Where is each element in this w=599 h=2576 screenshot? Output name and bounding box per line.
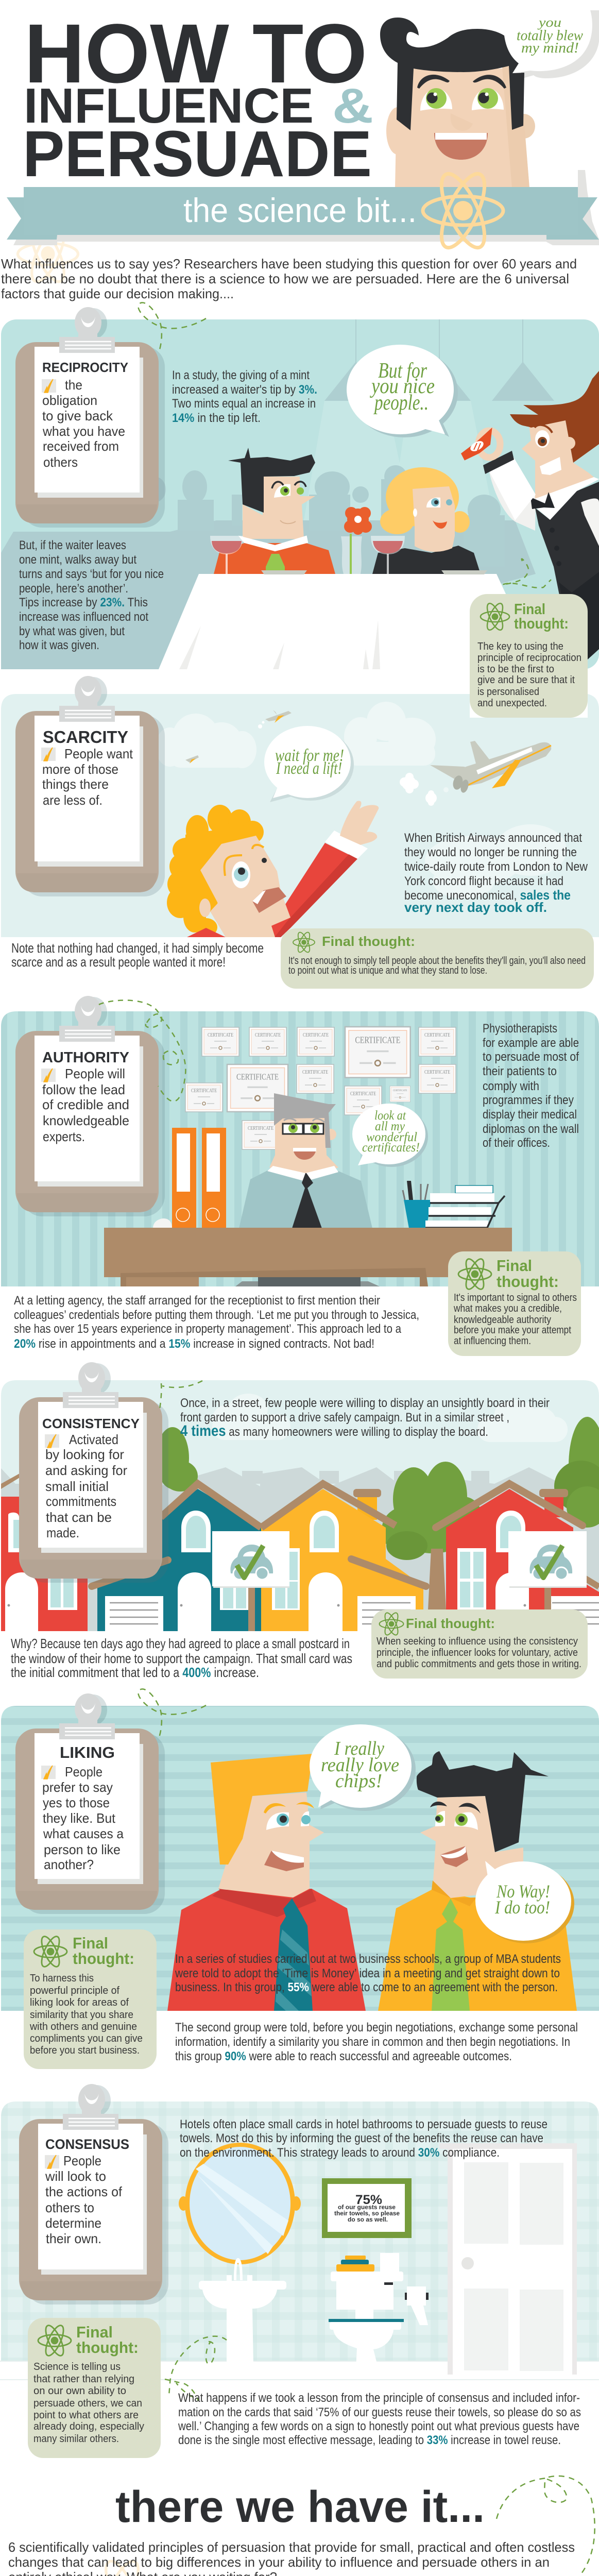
certificate large <box>227 1064 288 1112</box>
final thought: consistency: and public commitments and gets those in writing. <box>376 1658 581 1670</box>
lower text: But, if the waiter leaves <box>19 538 126 552</box>
certificate <box>297 1027 334 1056</box>
lower text: people, here’s another’. <box>19 582 128 596</box>
faded atom behind intro <box>18 222 78 286</box>
dashed path <box>138 1689 206 1739</box>
title: how to influence and persuade <box>23 6 373 190</box>
speech bubble: you totally blew my mind: you <box>537 15 561 30</box>
street text <box>180 1396 550 1439</box>
dashed path <box>138 302 206 353</box>
physiotherapists text: display their medical <box>483 1108 577 1122</box>
dashed path to footer atom <box>497 2476 595 2576</box>
hotels text: on the environment. This strategy leads to around 30% compliance. <box>180 2146 500 2160</box>
certificate <box>345 1086 382 1115</box>
table <box>159 570 541 669</box>
bubble: i really really love chips <box>310 1724 416 1811</box>
sign: drive safely right <box>508 1531 587 1631</box>
final thought: consensus: Final <box>76 2323 113 2341</box>
final thought: authority: what makes you a credible, <box>453 1303 562 1314</box>
physiotherapists text: to persuade most of <box>483 1050 579 1064</box>
bubble: wait for me: wait for me! <box>275 746 344 765</box>
certificate <box>242 1121 279 1149</box>
study text: 14% in the tip left. <box>172 411 261 425</box>
final thought: liking: thought: <box>73 1950 134 1968</box>
clipboard: reciprocity: RECIPROCITY <box>42 360 128 375</box>
panel: consistency <box>1 1362 599 1631</box>
certificate <box>185 1083 223 1112</box>
clipboard: liking: they like. But <box>43 1810 116 1826</box>
street text: front garden to support a drive safely campaign. But in a similar street , <box>180 1411 509 1425</box>
bubble: look at all my wonderful certificates: look at <box>374 1109 406 1123</box>
certificate <box>249 1027 286 1056</box>
final thought: reciprocity: is personalised <box>477 686 539 698</box>
physiotherapists text: of their offices. <box>483 1136 550 1150</box>
mba text <box>175 1952 561 1994</box>
desk items <box>403 1181 505 1228</box>
toilet <box>329 2253 429 2379</box>
clipboard: scarcity: things there <box>42 776 109 792</box>
panel: reciprocity <box>1 302 599 669</box>
certificates <box>185 1027 456 1149</box>
physiotherapists text: Physiotherapists <box>483 1022 557 1036</box>
speech bubble: you totally blew my mind <box>494 10 599 78</box>
panel: scarcity <box>1 676 599 937</box>
british airways text <box>404 831 588 915</box>
panel: consensus <box>0 2084 599 2401</box>
note text: scarce and as a result people wanted it more! <box>11 954 226 970</box>
hotels text: towels. Most do this by informing the guest of the benefits the reuse can have <box>180 2131 543 2145</box>
atom icon <box>38 2323 71 2358</box>
bubble: but for you nice people <box>347 345 458 437</box>
lower text: Tips increase by 23%. This <box>19 596 148 609</box>
clipboard: scarcity: more of those <box>42 761 118 777</box>
eyes <box>420 88 504 111</box>
banner: the science bit: the science bit... <box>183 191 417 229</box>
atom icon <box>293 931 315 954</box>
speech bubble: you totally blew my mind: totally blew <box>517 28 583 44</box>
restaurant background <box>1 319 554 669</box>
certificate: CERTIFICATE <box>248 1126 273 1131</box>
title: how to influence and persuade: HOW TO <box>24 6 367 100</box>
title: how to influence and persuade: PERSUADE <box>23 117 372 190</box>
character: blond man <box>167 1754 366 2011</box>
physiotherapists text: for example are able <box>483 1036 579 1050</box>
framed sign: 75 percent: 75% <box>355 2193 382 2207</box>
clipboard: consistency: Activated <box>69 1432 118 1447</box>
final thought: consistency: When seeking to influence using the consistency <box>376 1636 578 1647</box>
closing paragraph: 6 scientifically validated principles of persuasion that provide for small, practical and often costless <box>8 2539 575 2555</box>
bubble: no way i do too <box>475 1861 574 1943</box>
character: dark-haired man <box>378 1751 577 2011</box>
certificate small <box>390 1086 410 1102</box>
certificate small: CERTIFICATE <box>393 1089 407 1092</box>
clipboard: reciprocity: others <box>43 454 78 470</box>
final thought: reciprocity <box>470 594 588 718</box>
physiotherapists text <box>483 1022 579 1150</box>
final thought: consistency: principle, the influencer looks for voluntary, active <box>376 1647 578 1658</box>
what happens text <box>178 2391 581 2447</box>
mouth <box>434 133 488 160</box>
clipboard: authority: follow the lead <box>42 1082 125 1097</box>
heading: there we have it: there we have it... <box>115 2482 485 2532</box>
icon: small planes <box>185 710 292 764</box>
certificate: CERTIFICATE <box>255 1032 281 1038</box>
final thought: authority: It's important to signal to others <box>454 1292 577 1303</box>
note text: Note that nothing had changed, it had simply become <box>11 940 264 956</box>
certificate large: CERTIFICATE <box>355 1035 400 1045</box>
final thought: authority: Final <box>497 1257 532 1275</box>
clipboard: authority: knowledgeable <box>43 1113 129 1128</box>
clipboard: liking: LIKING <box>60 1743 115 1761</box>
clipboard: consensus <box>19 2084 168 2304</box>
physiotherapists text: their patients to <box>483 1064 557 1078</box>
final thought: liking: powerful principle of <box>30 1985 119 1996</box>
clipboard: scarcity: SCARCITY <box>43 727 128 747</box>
final thought: liking: with others and genuine <box>29 2021 137 2032</box>
panel: liking <box>1 1689 599 2011</box>
trees <box>156 1417 599 1610</box>
title: how to influence and persuade: INFLUENCE <box>24 78 314 133</box>
dashed path <box>160 1381 202 1409</box>
clipboard: consensus: determine <box>45 2215 101 2231</box>
british airways text: very next day took off. <box>404 900 547 915</box>
final thought: authority: thought: <box>497 1273 559 1291</box>
british airways text: become uneconomical, sales the <box>404 887 571 903</box>
clipboard: consistency: commitments <box>46 1494 116 1509</box>
atom icon <box>481 601 509 632</box>
mirror <box>179 2143 301 2264</box>
clipboard: consistency: by looking for <box>45 1447 124 1462</box>
bubble: wait for me: I need a lift! <box>276 759 342 778</box>
clipboard: reciprocity: received from <box>43 438 119 454</box>
bubble: but for you nice people: But for <box>378 359 427 383</box>
dashed path <box>99 1000 185 1101</box>
character: science guy head <box>380 18 535 188</box>
clipboard: reciprocity: what you have <box>42 423 125 439</box>
eyes <box>430 1802 481 1830</box>
closing paragraph <box>8 2539 575 2576</box>
lower text <box>19 538 164 652</box>
final thought: reciprocity: give and be sure that it <box>477 674 575 686</box>
letting agency text <box>14 1294 419 1351</box>
clipboard: reciprocity <box>15 307 165 528</box>
intro text: factors that guide our decision making.... <box>1 286 234 301</box>
dashed path lower <box>502 559 551 588</box>
final thought: consensus: that rather than relying <box>33 2374 134 2385</box>
final thought: scarcity <box>281 928 594 989</box>
clipboard: liking <box>15 1693 165 1914</box>
teal house <box>92 1484 261 1631</box>
atom icon <box>380 1611 403 1637</box>
clipboard: liking: person to like <box>44 1842 121 1857</box>
red house left <box>1 1473 88 1631</box>
final thought: consensus: on our own ability to <box>33 2385 126 2397</box>
clipboard: liking: another? <box>44 1857 94 1872</box>
final thought: consensus: already doing, especially <box>33 2421 144 2432</box>
certificate: CERTIFICATE <box>350 1091 376 1097</box>
study text <box>172 368 317 425</box>
letting agency text: colleagues’ credentials before putting them through. ‘Let me put you through to Jessica, <box>14 1308 419 1322</box>
lower text: increase was influenced not <box>19 610 148 624</box>
clipboard: consistency: small initial <box>45 1479 109 1494</box>
final thought: liking: before you start business. <box>30 2045 140 2056</box>
street text: 4 times as many homeowners were willing to display the board. <box>180 1422 488 1439</box>
bubble: wait for me <box>264 726 354 802</box>
final thought: consistency: Final thought: <box>406 1616 495 1631</box>
yellow house <box>261 1484 426 1631</box>
certificate: CERTIFICATE <box>424 1070 450 1075</box>
final thought: reciprocity: principle of reciprocation <box>477 652 581 664</box>
clipboard: authority: experts. <box>43 1129 85 1144</box>
final thought: authority: before you make your attempt <box>454 1325 571 1336</box>
certificate: CERTIFICATE <box>191 1088 217 1094</box>
bubble: but for you nice people: you nice <box>370 375 435 398</box>
why text: Why? Because ten days ago they had agreed to place a small postcard in <box>11 1636 350 1651</box>
clipboard: reciprocity: obligation <box>42 393 97 408</box>
clipboard: liking: what causes a <box>43 1826 124 1841</box>
character: diner man <box>214 448 335 574</box>
bubble: no way i do too: No Way! <box>496 1881 550 1902</box>
final thought: consensus: point to what others are <box>33 2410 139 2421</box>
door <box>439 2143 577 2375</box>
final thought: consensus: thought: <box>76 2338 139 2357</box>
bubble: look at all my wonderful certificates <box>352 1104 428 1167</box>
clipboard: authority: AUTHORITY <box>42 1049 129 1066</box>
physiotherapists text: programmes if they <box>483 1093 574 1107</box>
sign: drive safely left <box>212 1531 289 1631</box>
certificate <box>202 1027 239 1056</box>
clouds <box>156 702 567 899</box>
title: how to influence and persuade: & <box>332 78 373 133</box>
letting agency text: 20% rise in appointments and a 15% increase in signed contracts. Not bad! <box>14 1337 374 1351</box>
final thought: liking: similarity that you share <box>30 2009 133 2021</box>
speech bubble: you totally blew my mind: my mind! <box>521 40 579 56</box>
hotels text <box>180 2117 547 2160</box>
certificate <box>419 1027 456 1056</box>
final thought: reciprocity: and unexpected. <box>477 698 547 709</box>
lower text: turns and says ‘but for you nice <box>19 567 164 581</box>
clipboard: consensus: the actions of <box>45 2184 123 2199</box>
binders <box>153 1128 226 1228</box>
clipboard: scarcity <box>15 676 165 896</box>
framed sign: 75 percent <box>322 2178 412 2238</box>
intro text <box>1 256 577 301</box>
clipboard: consensus: others to <box>45 2200 94 2215</box>
atom icon <box>458 1257 491 1292</box>
eyebrows <box>417 75 506 89</box>
clipboard: liking: yes to those <box>43 1795 110 1810</box>
tie <box>274 1899 313 2011</box>
street text: Once, in a street, few people were willing to display an unsightly board in their <box>180 1396 550 1410</box>
eyes <box>264 1802 314 1830</box>
mba text: business. In this group, 55% were able to come to an agreement with the person. <box>175 1980 558 1994</box>
certificate: CERTIFICATE <box>208 1032 233 1038</box>
final thought: liking: To harness this <box>30 1973 94 1984</box>
puffs of smoke <box>400 773 449 806</box>
final thought: authority <box>448 1251 581 1356</box>
why text: the initial commitment that led to a 400% increase. <box>11 1665 259 1680</box>
lower text: how it was given. <box>19 638 99 652</box>
hair <box>167 805 264 937</box>
character: diner woman <box>372 467 481 574</box>
study text: In a study, the giving of a mint <box>172 368 310 382</box>
clipboard: reciprocity: the <box>65 377 82 393</box>
clipboard: consistency: and asking for <box>45 1463 127 1478</box>
wine glasses flower and vase <box>210 507 405 574</box>
final thought: authority: knowledgeable authority <box>454 1314 551 1326</box>
clipboard: consensus: CONSENSUS <box>45 2137 129 2152</box>
tie <box>432 1899 470 2011</box>
clouds <box>212 1394 568 1442</box>
clipboard: scarcity: People want <box>64 746 133 761</box>
background houses <box>1 1467 599 1631</box>
clipboard: liking: People <box>65 1764 102 1780</box>
final thought: consistency <box>371 1609 588 1679</box>
final thought: liking: liking look for areas of <box>30 1997 129 2008</box>
faded atom above footer <box>92 2557 152 2576</box>
bubble: no way i do too: I do too! <box>494 1897 550 1918</box>
framed sign: 75 percent: of our guests reuse <box>338 2204 396 2211</box>
framed sign: 75 percent: do so as well. <box>348 2216 388 2223</box>
final thought: consensus: persuade others, we can <box>33 2398 142 2409</box>
final thought: scarcity: to point out what is unique and what they stand to lose. <box>288 965 487 976</box>
bubble: i really really love chips: I really <box>334 1738 384 1759</box>
glasses <box>283 1118 324 1134</box>
final thought: scarcity: Final thought: <box>322 934 415 949</box>
certificate <box>297 1064 334 1093</box>
framed sign: 75 percent: their towels, so please <box>334 2210 400 2217</box>
clipboard: consistency: made. <box>46 1525 79 1540</box>
closing paragraph: changes that can lead to big differences in your ability to influence and persuade others in an <box>8 2554 550 2570</box>
certificate large <box>345 1027 410 1078</box>
character: running boy <box>167 801 379 937</box>
study text: increased a waiter's tip by 3%. <box>172 383 317 397</box>
final thought: liking: Final <box>73 1934 108 1952</box>
desk <box>104 1228 512 1286</box>
dashed path <box>165 2336 227 2401</box>
british airways text: York concord flight because it had <box>404 874 563 888</box>
clipboard: reciprocity: to give back <box>42 408 113 423</box>
second group text <box>175 2021 578 2063</box>
final thought: consensus <box>28 2318 161 2458</box>
clipboard: consensus: People <box>63 2153 101 2168</box>
final thought: liking <box>24 1929 157 2069</box>
british airways text: they would no longer be running the <box>404 845 577 859</box>
banner: the science bit <box>7 168 599 253</box>
bubble: look at all my wonderful certificates: all my <box>375 1120 405 1133</box>
final thought: consensus: Science is telling us <box>33 2361 121 2372</box>
arm and hand <box>459 428 536 520</box>
certificate: CERTIFICATE <box>424 1032 450 1038</box>
red arm <box>270 801 379 937</box>
clipboard: consistency <box>19 1362 168 1583</box>
certificate <box>419 1064 456 1093</box>
sink <box>199 2258 286 2376</box>
letting agency text: she has over 15 years experience in property management’. This approach led to a <box>14 1322 402 1336</box>
certificate: CERTIFICATE <box>303 1032 329 1038</box>
bubble: look at all my wonderful certificates: certificates! <box>362 1141 420 1155</box>
character: authority man <box>239 1093 372 1228</box>
lower text: one mint, walks away but <box>19 553 136 567</box>
physiotherapists text: diplomas on the wall <box>483 1122 579 1136</box>
hotels text: Hotels often place small cards in hotel bathrooms to persuade guests to reuse <box>180 2117 547 2131</box>
intro text: What influences us to say yes? Researchers have been studying this question for over 60 years and <box>1 256 577 272</box>
final thought: consensus: many similar others. <box>33 2433 119 2445</box>
certificate: CERTIFICATE <box>302 1070 328 1075</box>
bubble: look at all my wonderful certificates: wonderful <box>366 1130 417 1144</box>
clipboard: consensus: their own. <box>46 2231 101 2246</box>
final thought: reciprocity: thought: <box>514 616 569 632</box>
physiotherapists text: comply with <box>483 1079 539 1093</box>
final thought: reciprocity: is to be the first to <box>477 664 554 675</box>
atom icon large <box>423 168 503 253</box>
bubble: i really really love chips: really love <box>321 1754 399 1776</box>
character: waiter <box>459 371 599 669</box>
panel: authority <box>1 996 599 1286</box>
certificate large: CERTIFICATE <box>236 1072 279 1082</box>
final thought: reciprocity: The key to using the <box>477 641 563 652</box>
red house right <box>436 1484 599 1631</box>
letting agency text: At a letting agency, the staff arranged for the receptionist to first mention their <box>14 1294 380 1308</box>
intro text: there can be no doubt that there is a science to how we are persuaded. Here are the 6 universal <box>1 271 569 286</box>
lower text: by what was given, but <box>19 624 125 638</box>
note text <box>11 940 264 970</box>
clipboard: authority <box>15 996 165 1216</box>
clipboard: consistency: CONSISTENCY <box>42 1416 140 1431</box>
why text: the window of their home to support the campaign. That small card was <box>11 1651 352 1666</box>
study text: Two mints equal an increase in <box>172 397 316 411</box>
final thought: authority: at influencing them. <box>454 1335 531 1347</box>
bubble: i really really love chips: chips! <box>335 1770 382 1792</box>
bubble: but for you nice people: people.. <box>373 391 429 415</box>
clipboard: authority: of credible and <box>42 1097 129 1112</box>
clipboard: consensus: will look to <box>45 2168 106 2184</box>
final thought: reciprocity: Final <box>514 601 545 618</box>
second group text: this group 90% were able to reach successful and agreeable outcomes. <box>175 2049 512 2063</box>
clipboard: scarcity: are less of. <box>43 792 102 808</box>
icon: big plane <box>430 741 551 793</box>
clipboard: consistency: that can be <box>46 1510 112 1525</box>
clipboard: liking: prefer to say <box>42 1780 113 1795</box>
why text <box>11 1636 352 1680</box>
final thought: liking: compliments you can give <box>30 2033 143 2044</box>
atom icon <box>34 1934 67 1969</box>
clipboard: authority: People will <box>65 1066 125 1081</box>
what happens text: done is the single most effective message, leading to 33% increase in towel reuse. <box>178 2433 561 2447</box>
